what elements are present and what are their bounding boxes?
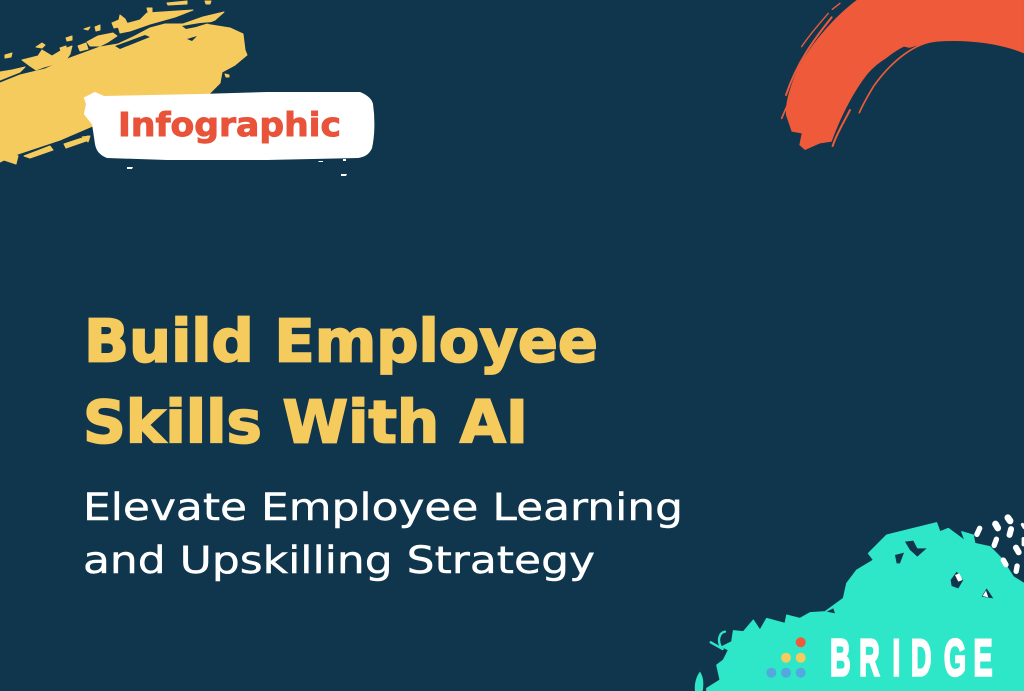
red brush arc [782,0,1024,150]
yellow brush stroke [0,1,247,164]
white brush label [85,93,373,176]
logo wordmark: BRIDGE: BRIDGE [830,628,993,687]
white speckle dashes [973,513,1024,574]
teal brush shape [695,523,1024,691]
subtitle: and Upskilling Strategy [83,539,595,582]
label text: Infographic: Infographic [118,105,341,144]
logo dots icon [766,637,806,678]
Bridge logo [766,628,993,687]
title: Skills With AI [83,388,528,456]
title [83,306,598,456]
subtitle: Elevate Employee Learning [83,486,683,529]
title: Build Employee [84,306,598,376]
subtitle [83,486,683,582]
